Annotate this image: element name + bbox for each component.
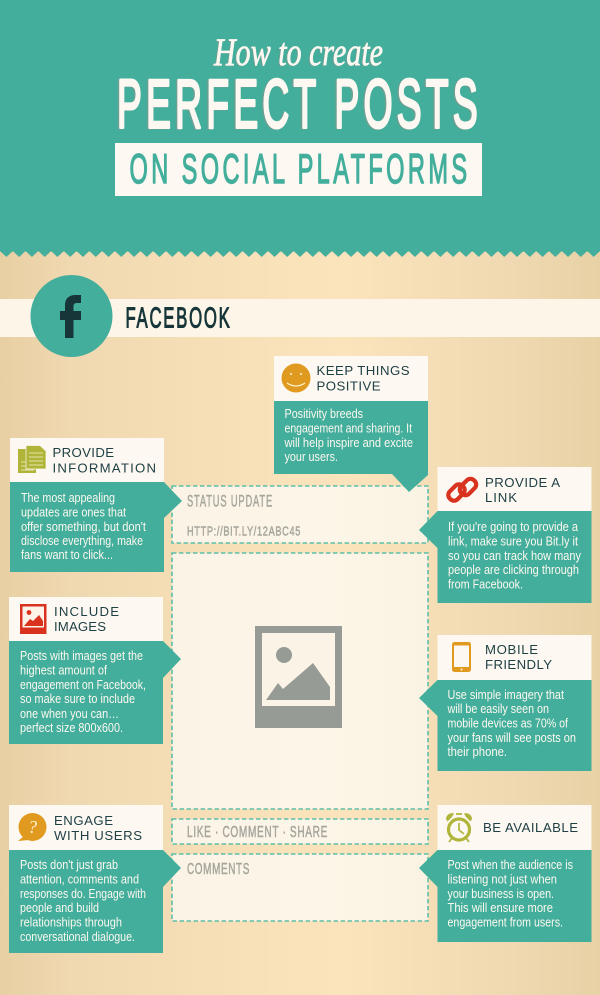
body: The most appealing bbox=[21, 490, 115, 505]
body: updates are ones that bbox=[21, 504, 126, 520]
body: Posts with images get the bbox=[20, 648, 143, 663]
body: fans want to click... bbox=[21, 547, 113, 562]
icon: phone bbox=[452, 642, 471, 672]
body: listening not just when bbox=[448, 872, 557, 886]
body bbox=[10, 482, 182, 572]
icon: question bubble: ? bbox=[28, 817, 37, 837]
status update box: STATUS UPDATE bbox=[187, 492, 273, 510]
icon: alarm clock bbox=[446, 813, 472, 842]
heading bbox=[52, 445, 156, 476]
icon: smiley bbox=[282, 364, 310, 392]
body: If you're going to provide a bbox=[448, 519, 579, 534]
body: engagement on Facebook, bbox=[20, 677, 146, 692]
heading bbox=[485, 642, 552, 672]
body: your business is open. bbox=[448, 886, 554, 901]
heading: KEEP THINGS bbox=[316, 363, 410, 378]
like comment share box: LIKE · COMMENT · SHARE bbox=[187, 824, 328, 841]
body: Posts don't just grab bbox=[20, 857, 118, 872]
body: offer something, but don't bbox=[21, 519, 146, 534]
body: link, make sure you Bit.ly it bbox=[448, 534, 578, 548]
body: your users. bbox=[284, 449, 338, 464]
body bbox=[9, 641, 181, 744]
heading bbox=[316, 363, 410, 394]
callout: mobile friendly bbox=[419, 635, 592, 771]
body: will help inspire and excite bbox=[284, 435, 413, 450]
status update box: HTTP://BIT.LY/12ABC45 bbox=[187, 524, 301, 538]
image box bbox=[172, 553, 428, 809]
body: engagement from users. bbox=[448, 914, 563, 930]
heading: INCLUDE bbox=[54, 604, 119, 619]
heading: WITH USERS bbox=[54, 828, 142, 843]
body: will be easily seen on bbox=[447, 701, 549, 716]
facebook label: FACEBOOK bbox=[126, 302, 232, 334]
body: relationships through bbox=[20, 914, 122, 930]
body: one when you can… bbox=[20, 706, 119, 721]
body bbox=[419, 850, 592, 942]
body: conversational dialogue. bbox=[20, 929, 135, 944]
icon: red picture bbox=[20, 604, 46, 634]
post mockup bbox=[172, 486, 428, 921]
heading: INFORMATION bbox=[52, 460, 156, 476]
body: your fans will see posts on bbox=[448, 730, 576, 745]
body: so you can track how many bbox=[448, 548, 581, 563]
body: so make sure to include bbox=[20, 691, 135, 706]
body: people and build bbox=[20, 900, 99, 915]
heading: POSITIVE bbox=[316, 378, 381, 394]
callout: keep things positive bbox=[274, 356, 428, 492]
callout: include images bbox=[9, 597, 181, 744]
heading: FRIENDLY bbox=[485, 657, 552, 672]
body bbox=[274, 401, 428, 492]
body bbox=[9, 850, 181, 953]
body: highest amount of bbox=[20, 662, 107, 678]
title line: how to create: How to create bbox=[213, 31, 383, 74]
heading: BE AVAILABLE bbox=[483, 820, 578, 835]
status update box bbox=[172, 486, 428, 543]
body: mobile devices as 70% of bbox=[448, 716, 568, 730]
background bbox=[0, 250, 600, 995]
body: their phone. bbox=[448, 744, 507, 759]
callout: provide information bbox=[10, 438, 182, 572]
comments box bbox=[172, 854, 428, 921]
icon: image placeholder bbox=[255, 626, 342, 728]
comments box: COMMENTS bbox=[187, 861, 250, 878]
body: attention, comments and bbox=[20, 872, 139, 886]
callout: engage with users bbox=[9, 805, 181, 953]
body bbox=[419, 511, 592, 603]
icon: chain link bbox=[446, 477, 478, 503]
body: perfect size 800x600. bbox=[20, 720, 123, 735]
body: from Facebook. bbox=[448, 576, 523, 592]
body: This will ensure more bbox=[448, 900, 553, 915]
title line: on social platforms bbox=[115, 143, 482, 196]
icon: documents bbox=[18, 446, 46, 473]
heading: LINK bbox=[485, 490, 517, 505]
like comment share box bbox=[172, 819, 428, 844]
heading: PROVIDE A bbox=[485, 475, 560, 490]
heading: IMAGES bbox=[54, 619, 106, 634]
facebook section heading bbox=[0, 275, 600, 357]
heading: ENGAGE bbox=[54, 813, 113, 828]
body: responses do. Engage with bbox=[20, 886, 146, 901]
heading bbox=[485, 475, 560, 505]
title bbox=[115, 31, 482, 196]
icon: question bubble bbox=[18, 813, 46, 841]
body bbox=[419, 680, 592, 771]
title line: how to create: How to create bbox=[212, 32, 382, 74]
header banner bbox=[0, 0, 600, 257]
body: Use simple imagery that bbox=[448, 687, 564, 702]
callout: provide a link bbox=[419, 467, 592, 603]
heading bbox=[54, 813, 142, 843]
heading: MOBILE bbox=[485, 642, 538, 657]
heading bbox=[54, 604, 119, 634]
callout: be available bbox=[419, 805, 592, 942]
body: Positivity breeds bbox=[284, 406, 363, 421]
body: disclose everything, make bbox=[21, 533, 143, 548]
body: engagement and sharing. It bbox=[284, 420, 412, 436]
heading: PROVIDE bbox=[52, 445, 114, 460]
icon: facebook bbox=[30, 275, 112, 357]
body: people are clicking through bbox=[448, 562, 579, 577]
body: Post when the audience is bbox=[448, 857, 573, 872]
